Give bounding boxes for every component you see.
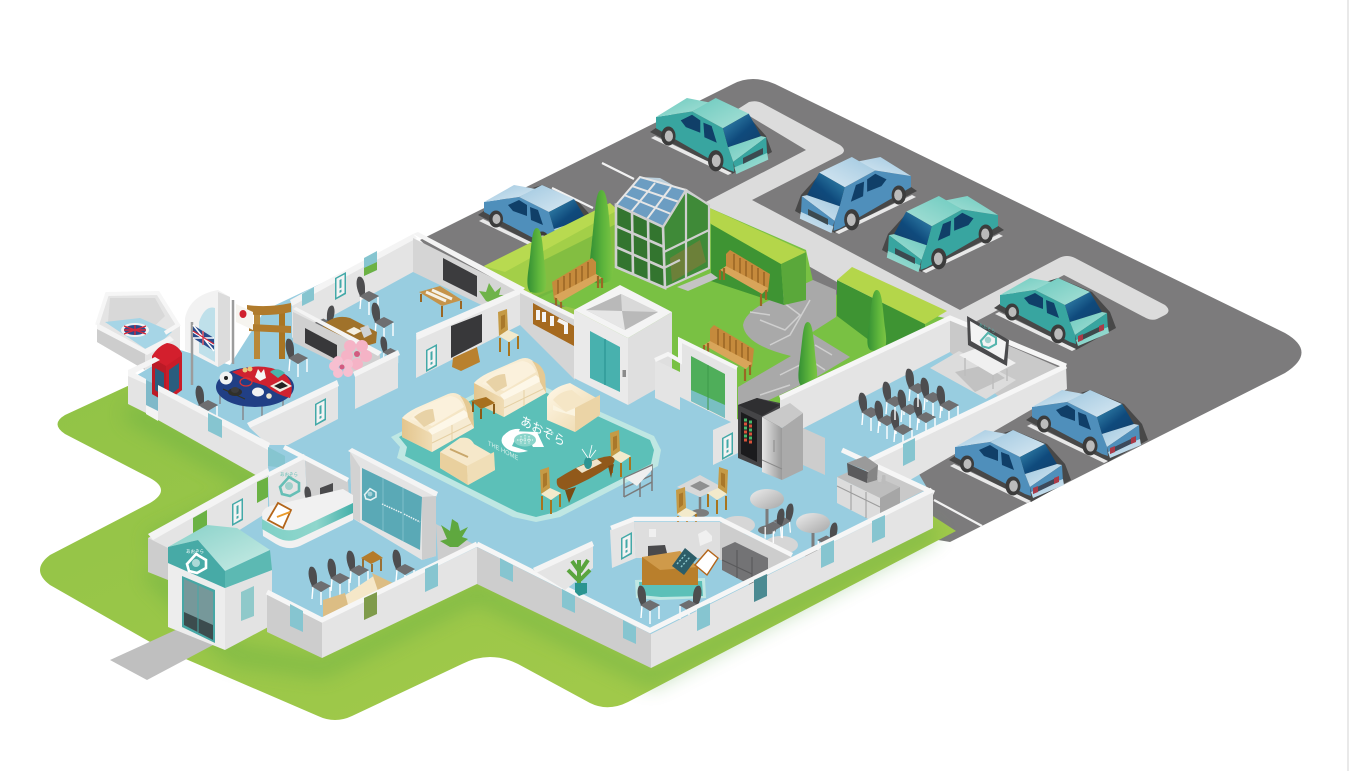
curved desk bbox=[323, 317, 377, 352]
office desk, rug, cabinets bbox=[635, 542, 768, 624]
office walls bbox=[610, 519, 792, 570]
lectern table bbox=[959, 345, 1016, 389]
parking lot asphalt bbox=[420, 79, 1302, 542]
coffee table with chairs, vase and cart bbox=[540, 430, 652, 514]
partition beside blossom bbox=[353, 350, 400, 409]
elevator doors bbox=[590, 331, 620, 392]
kitchen corner bbox=[837, 450, 934, 525]
garden lawn bbox=[486, 195, 945, 425]
union flag bbox=[192, 322, 214, 385]
conference room: あおぞら bbox=[979, 321, 995, 335]
kitchen counter bbox=[837, 468, 900, 498]
stone path bbox=[738, 280, 850, 415]
chair rows bbox=[859, 393, 881, 431]
cherry blossom bbox=[329, 340, 372, 378]
reception rear walls bbox=[268, 447, 350, 522]
front wall east bbox=[649, 490, 933, 668]
canvas edge bbox=[1347, 0, 1349, 771]
small diorama sign with union flag bbox=[97, 293, 180, 370]
upper room wall with TV and blossom bbox=[293, 307, 382, 385]
carpet logo and lettering: あおぞら bbox=[519, 413, 566, 449]
microwave bbox=[847, 456, 878, 472]
screen bbox=[967, 316, 1009, 366]
porch logo: あおぞら bbox=[186, 548, 204, 555]
podium bbox=[930, 351, 1016, 399]
cars in the car park bbox=[484, 98, 1109, 346]
upper room furniture bbox=[314, 277, 504, 367]
tea table bbox=[216, 366, 294, 422]
building floor bbox=[132, 240, 1062, 655]
plant near door wall bbox=[440, 519, 468, 547]
entrance walkway bbox=[110, 628, 213, 680]
greenhouse bbox=[616, 177, 718, 291]
waiting area chairs and side table bbox=[309, 550, 415, 605]
armchair front bbox=[440, 438, 495, 485]
glass door wall to garden bbox=[655, 340, 737, 425]
lobby wall with television bbox=[416, 288, 525, 378]
upper room side wall with TV bbox=[413, 232, 525, 325]
lobby sofas bbox=[402, 358, 600, 485]
torii gate bbox=[247, 303, 291, 359]
stub wall by fridge bbox=[803, 428, 825, 475]
rear hedge left bbox=[484, 203, 620, 302]
arch bbox=[185, 290, 230, 367]
canteen half tables bbox=[721, 516, 798, 554]
garden trees bbox=[527, 190, 886, 387]
lawn around the building bbox=[40, 300, 956, 720]
garden benches bbox=[552, 250, 770, 381]
partition with notice in display room bbox=[247, 380, 339, 445]
cars beside the conference room bbox=[949, 390, 1148, 503]
carpet logo and lettering: THE HOME bbox=[488, 440, 519, 463]
side table bbox=[471, 397, 495, 419]
elevator tower bbox=[574, 285, 672, 405]
reception rear walls: あおぞら bbox=[280, 471, 298, 478]
notice board wall bbox=[520, 288, 575, 380]
Japanese flag bbox=[233, 300, 253, 364]
chair bbox=[286, 339, 308, 377]
armchair right bbox=[547, 383, 600, 432]
entrance porch bbox=[168, 525, 272, 650]
front wall centre bbox=[477, 544, 651, 668]
front hedge bbox=[837, 267, 947, 356]
light service road bbox=[700, 101, 1168, 340]
rear hedge right bbox=[681, 195, 806, 305]
chair bbox=[196, 386, 218, 424]
waiting room sofa bbox=[323, 573, 397, 617]
entrance door bbox=[182, 576, 215, 643]
carpet logo and lettering bbox=[488, 413, 566, 463]
reception left wall bbox=[148, 468, 270, 580]
left office wall with plant bbox=[533, 541, 594, 596]
red phone box bbox=[152, 343, 182, 402]
reception desk bbox=[262, 483, 353, 548]
vending machine and fridge bbox=[738, 398, 803, 480]
double door wall bbox=[348, 448, 475, 562]
conference room bbox=[780, 316, 1067, 482]
canteen tables and chairs bbox=[676, 467, 838, 558]
UK and Japan display corner bbox=[152, 300, 308, 424]
parking bays with painted lines bbox=[478, 102, 1116, 526]
front wall bbox=[910, 366, 1067, 480]
front wall west bbox=[267, 544, 477, 658]
lobby carpet bbox=[391, 378, 661, 522]
upper room back wall bbox=[290, 234, 417, 338]
front wall of display corner bbox=[128, 357, 285, 482]
back walls bbox=[780, 318, 950, 430]
left wall with notice by vending bbox=[713, 419, 738, 465]
